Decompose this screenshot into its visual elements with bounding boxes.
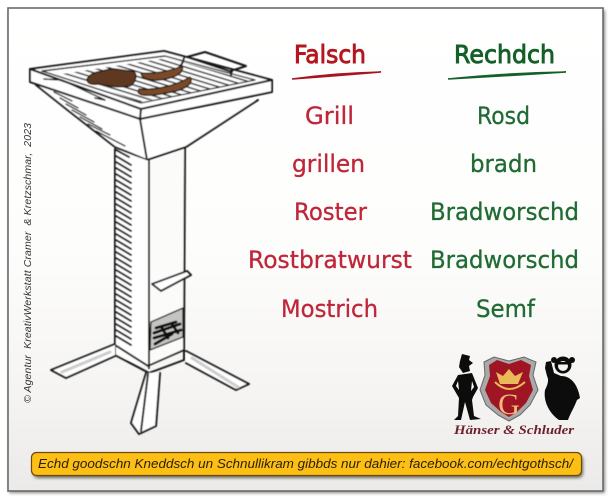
illustration: hand-drawn grill with sausages	[30, 51, 272, 434]
logo: Hänser & Schluder	[452, 354, 580, 437]
icon: crest shield with crown and letter G: G	[498, 388, 520, 421]
word: bradn: bradn	[470, 150, 537, 178]
underline: Rechdch	[448, 72, 566, 79]
icon: man silhouette	[452, 354, 481, 420]
word: Semf: Semf	[476, 295, 536, 323]
heading: Falsch: Falsch	[294, 40, 366, 69]
underline: Falsch	[292, 72, 381, 79]
column: Rechdch (right)	[430, 40, 579, 323]
word: Rostbratwurst: Rostbratwurst	[248, 246, 412, 274]
column: Falsch (wrong)	[248, 40, 412, 323]
word: Rosd: Rosd	[477, 102, 530, 130]
caption: Hänser & Schluder: Hänser & Schluder	[453, 423, 574, 437]
word: Bradworschd second: Bradworschd	[430, 246, 579, 274]
word: Bradworschd: Bradworschd	[430, 198, 579, 226]
word: Roster: Roster	[294, 198, 367, 226]
copyright credit, rotated: © Agentur KreativWerkstatt Cramer & Kretzschmar, 2023	[22, 123, 34, 403]
word: Mostrich: Mostrich	[281, 295, 378, 323]
heading: Rechdch: Rechdch	[454, 40, 555, 69]
funnel below the tray	[36, 85, 258, 160]
banner: yellow call to action	[32, 452, 583, 478]
icon: woman silhouette waving	[545, 356, 580, 420]
column with hatching	[115, 149, 185, 368]
food: steak and two sausages	[87, 66, 191, 95]
word: Grill: Grill	[305, 102, 354, 130]
word: grillen: grillen	[292, 150, 365, 178]
base and three feet	[51, 344, 249, 434]
ash drawer handle and fire opening	[150, 271, 191, 350]
grill tray with grate	[30, 51, 272, 119]
banner: yellow call to action: Echd goodschn Kneddsch un Schnullikram gibbds nur dahier: facebook.com/echtgothsch/	[38, 457, 575, 471]
